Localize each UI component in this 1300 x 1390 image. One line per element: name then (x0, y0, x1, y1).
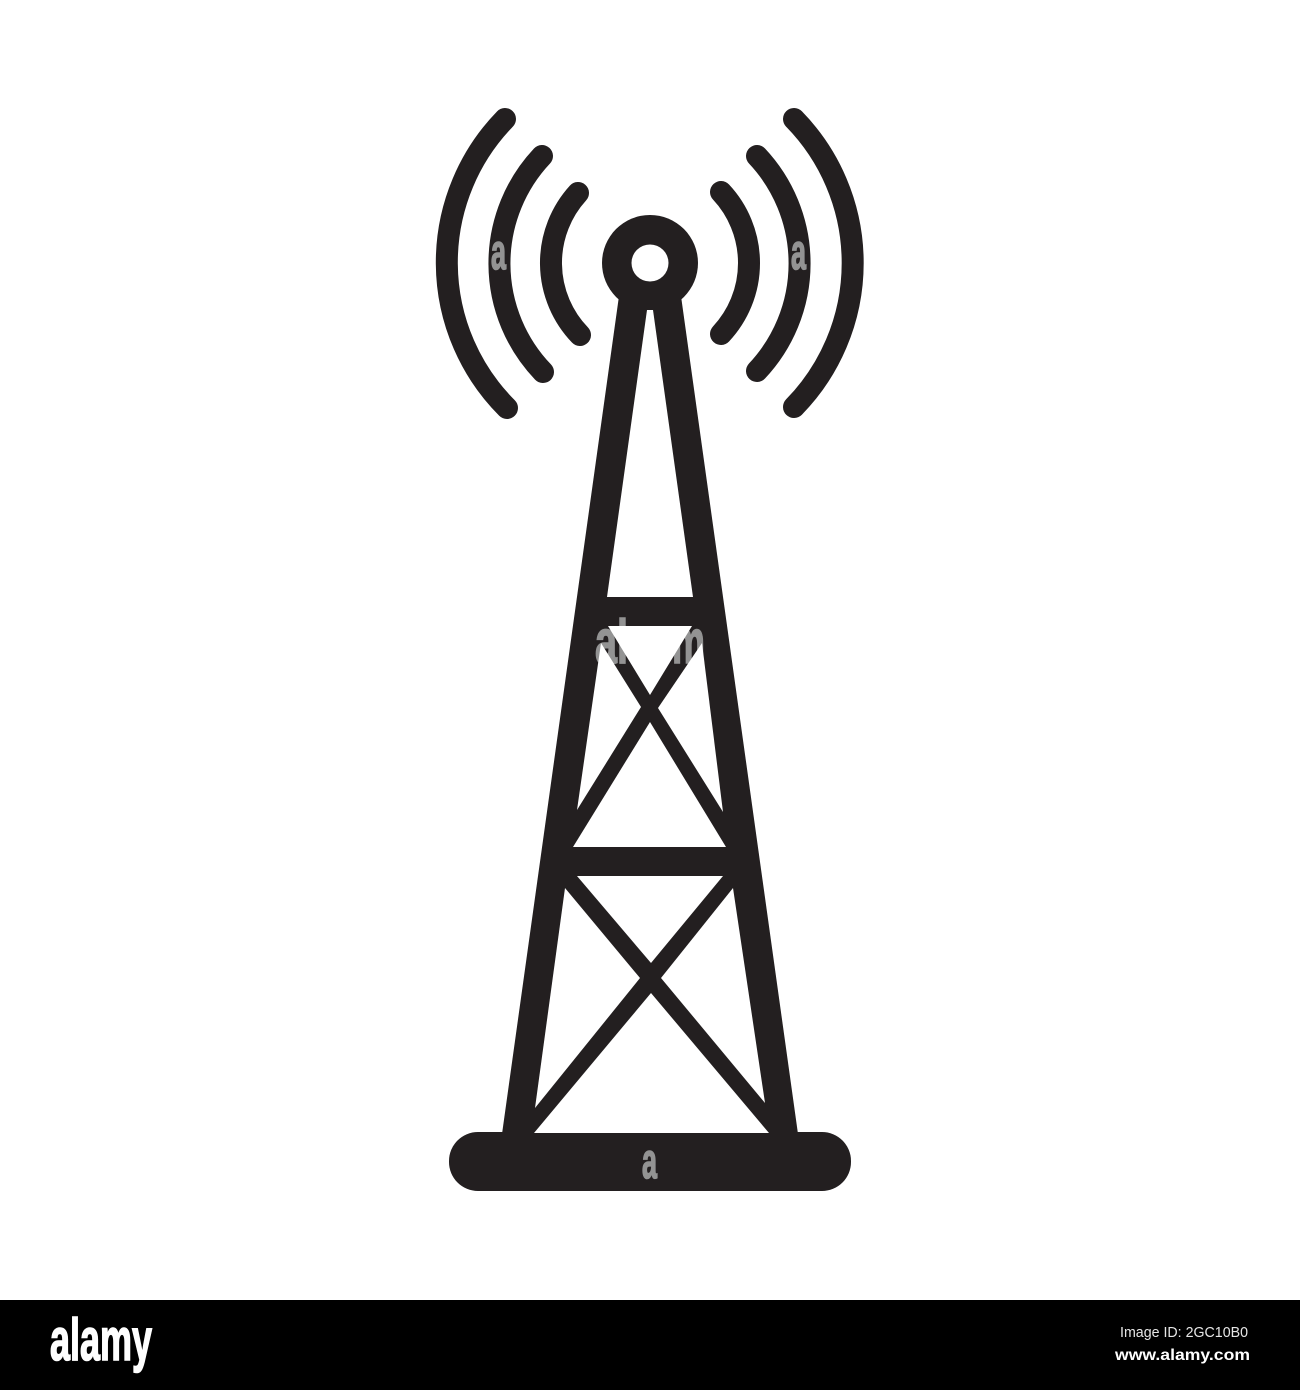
watermark letters: a (491, 224, 507, 280)
tower body silhouette (502, 296, 798, 1134)
watermark letters: m (672, 608, 705, 677)
website: www.alamy.com (1114, 1347, 1250, 1364)
watermark letters: al (595, 608, 628, 677)
tower base (449, 1132, 851, 1191)
tower lattice openings (534, 310, 769, 1133)
antenna head circle (602, 215, 698, 311)
signal waves: left (447, 119, 580, 408)
signal waves: right (721, 119, 853, 407)
watermark letters: a (642, 1133, 658, 1189)
image id: Image ID: 2GC10B0 (1120, 1324, 1248, 1341)
footer bar (0, 1300, 1300, 1390)
watermark letters (491, 224, 807, 1189)
antenna head opening (632, 244, 668, 282)
icon: radio tower with signal waves (447, 119, 853, 1191)
watermark letters: a (791, 224, 807, 280)
footer logo: alamy (50, 1307, 152, 1373)
